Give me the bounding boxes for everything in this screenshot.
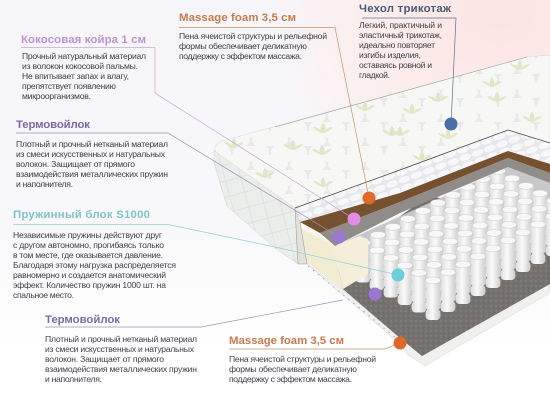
bottom felt layer <box>330 195 550 356</box>
leader line <box>21 48 354 219</box>
callout: massage foam bottom <box>229 335 400 384</box>
description: Прочный натуральный материал <box>22 51 146 61</box>
callout: coconut coir <box>21 34 354 219</box>
dot: spring block <box>392 268 404 282</box>
spring block base <box>335 167 550 280</box>
bottom foam layer <box>307 264 550 366</box>
description <box>22 51 146 101</box>
description: и наполнителя. <box>16 179 73 189</box>
description: микроорганизмов. <box>22 91 91 101</box>
mattress side face <box>214 150 298 264</box>
description: взаимодействия металлических пружин <box>16 169 168 179</box>
top foam layer <box>295 130 550 222</box>
description: Легкий, практичный и <box>359 20 442 30</box>
description: Плотный и прочный нетканый материал <box>16 139 168 149</box>
dot: massage foam top <box>362 192 376 204</box>
callout: knitted cover <box>359 3 456 124</box>
heading: Massage foam 3,5 см <box>179 12 296 24</box>
description: поддержку с эффектом массажа. <box>229 374 352 384</box>
heading: Пружинный блок S1000 <box>13 209 150 221</box>
latex edge block <box>300 228 368 289</box>
description: равномерно и создается анатомический <box>13 270 166 280</box>
description: волокон. Защищает от прямого <box>16 159 135 169</box>
mattress corner strip <box>295 208 307 264</box>
description: поддержку с эффектом массажа. <box>179 51 302 61</box>
description: формы обеспечивает деликатную <box>179 41 308 51</box>
coconut coir layer <box>300 151 550 233</box>
description: эффект. Количество пружин 1000 шт. на <box>13 280 166 290</box>
description: Независимые пружины действуют друг <box>13 230 162 240</box>
description: гладкой. <box>359 70 390 80</box>
description: Благодаря этому нагрузка распределяется <box>13 260 176 270</box>
description: оставаясь ровной и <box>359 60 432 70</box>
pocket spring block <box>355 168 550 320</box>
description: Пена ячеистой структуры и рельефной <box>229 354 376 364</box>
dot: coconut coir <box>348 212 360 226</box>
dot: knitted cover <box>444 118 458 130</box>
callout: thermal felt lower <box>45 300 343 384</box>
description <box>179 31 327 61</box>
description: взаимодействия металлических пружин <box>45 364 197 374</box>
leader line <box>13 224 398 275</box>
marker dots <box>332 118 458 350</box>
upper felt layer <box>320 158 550 246</box>
heading: Чехол трикотаж <box>359 3 452 15</box>
callout: thermal felt upper <box>16 119 339 237</box>
heading: Massage foam 3,5 см <box>229 335 344 347</box>
description: спальное место. <box>13 290 74 300</box>
dot: massage foam bottom <box>394 336 406 350</box>
dot: felt upper <box>332 230 346 244</box>
callout: massage foam top <box>179 12 369 198</box>
description <box>16 139 168 189</box>
description: из смеси искусственных и натуральных <box>45 344 195 354</box>
description: и наполнителя. <box>45 374 102 384</box>
mattress cross-section <box>214 55 550 366</box>
dot: felt lower <box>368 288 382 300</box>
description: эластичный трикотаж, <box>359 30 442 40</box>
description: с другом автономно, прогибаясь только <box>13 240 164 250</box>
description: Плотный и прочный нетканый материал <box>45 334 197 344</box>
description: формы обеспечивает деликатную <box>229 364 358 374</box>
description: в том месте, где оказывается давление. <box>13 250 163 260</box>
description: Пена ячеистой структуры и рельефной <box>179 31 327 41</box>
leader line <box>16 133 339 237</box>
heading: Термовойлок <box>16 119 90 131</box>
leader line <box>229 343 400 349</box>
description: изгибы изделия, <box>359 50 421 60</box>
heading: Термовойлок <box>45 314 120 326</box>
description <box>45 334 197 384</box>
leader line <box>362 18 456 124</box>
description: препятствует появлению <box>22 81 117 91</box>
callout: spring block S1000 <box>13 209 398 300</box>
description: Не впитывает запах и влагу, <box>22 71 129 81</box>
quilted top cover <box>215 55 550 208</box>
description: идеально повторяет <box>359 40 435 50</box>
description: волокон. Защищает от прямого <box>45 354 164 364</box>
description <box>13 230 176 300</box>
leader line <box>179 28 369 198</box>
description <box>229 354 376 384</box>
leader line <box>45 300 343 327</box>
description <box>359 20 442 80</box>
description: из смеси искусственных и натуральных <box>16 149 166 159</box>
description: из волокон кокосовой пальмы. <box>22 61 138 71</box>
heading: Кокосовая койра 1 см <box>21 34 146 46</box>
